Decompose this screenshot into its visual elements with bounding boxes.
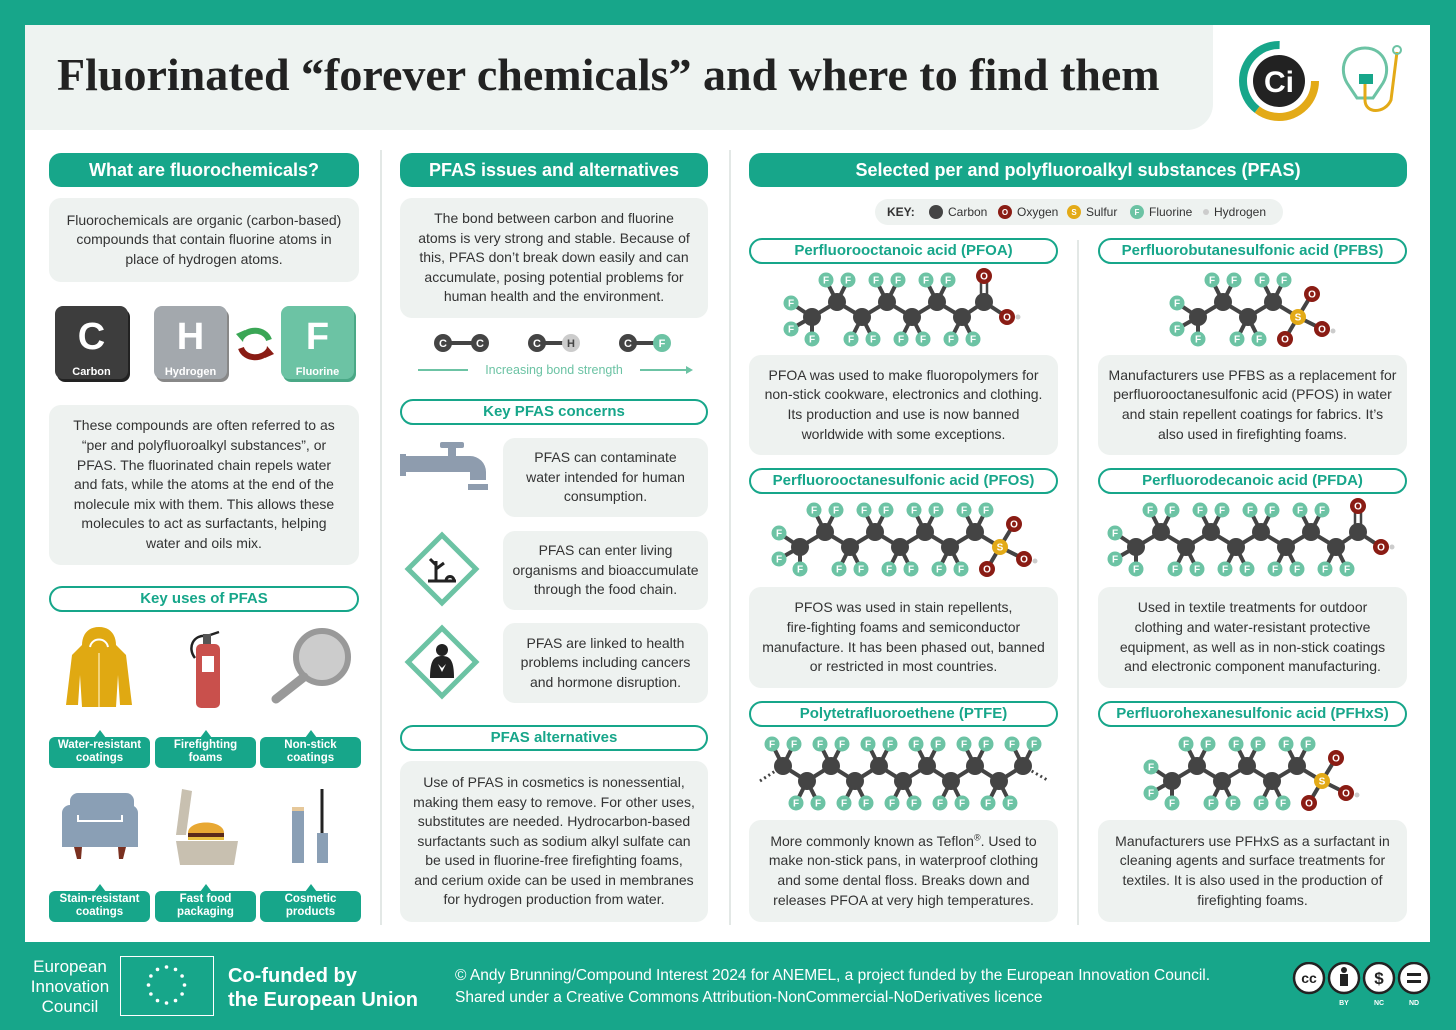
molecule: PFHxS: F: [1148, 788, 1154, 800]
title bar: [25, 25, 1213, 130]
molecule: PFBS: F: [1231, 276, 1237, 286]
molecule: PFDA: F: [1244, 564, 1250, 576]
molecule: PFHxS: O: [1332, 754, 1340, 764]
text block: PFAS explanation: water and oils mix.: [146, 535, 262, 551]
molecule: PFOA: [784, 268, 1020, 346]
text block: definition: compounds that contain fluorine atoms in: [76, 231, 332, 247]
molecule: PFOS: F: [961, 506, 967, 516]
molecule: PTFE: F: [985, 798, 991, 810]
text block: alternatives: Use of PFAS in cosmetics is nonessential,: [423, 774, 685, 790]
molecule: PFOA: F: [873, 276, 879, 286]
heading: PFDA: [1098, 468, 1407, 494]
text block: bioaccumulate: organisms and bioaccumulate: [512, 562, 698, 578]
molecule: PTFE: F: [983, 740, 989, 750]
text block: PFOA: PFOA was used to make fluoropolymers for: [768, 367, 1038, 383]
molecule: PTFE: F: [1009, 740, 1015, 750]
icon: fire extinguisher: [190, 630, 220, 708]
heading: key concerns: [400, 399, 708, 425]
molecule: PFDA: F: [1222, 564, 1228, 576]
label: water-resistant: [49, 737, 150, 768]
footer: EIC name: Council: [42, 997, 98, 1016]
bond strength diagram: H: [567, 338, 575, 350]
molecule: PFDA: F: [1247, 506, 1253, 516]
molecule: PTFE: F: [841, 798, 847, 810]
label: stain-resistant: [49, 891, 150, 922]
molecule: PFHxS: F: [1230, 798, 1236, 810]
molecule: PFHxS: F: [1258, 798, 1264, 810]
text block: PFAS explanation: molecules to act as surfactants, helping: [81, 515, 327, 531]
text block: PFDA: [1098, 587, 1407, 688]
molecule: PFOA: F: [948, 334, 954, 346]
label: water-resistant: Water-resistant: [58, 739, 141, 751]
molecule: PFOS: O: [1010, 520, 1018, 530]
tile: hydrogen: H: [177, 316, 204, 358]
molecule: PFBS: O: [1318, 324, 1326, 336]
label: cosmetic: products: [286, 906, 335, 918]
text block: definition: place of hydrogen atoms.: [125, 251, 283, 267]
icon: tap: [400, 442, 488, 490]
icon: health hazard: [404, 624, 480, 700]
molecule: PTFE: F: [815, 798, 821, 810]
text block: PFBS: Manufacturers use PFBS as a replacement for: [1109, 367, 1396, 383]
text block: alternatives: surfactants such as sodium alkyl sulfate can: [417, 833, 691, 849]
tile: carbon: [55, 306, 128, 379]
molecule: PFOA: F: [788, 324, 794, 336]
text block: PFOA: Its production and use is now banned: [788, 406, 1019, 422]
label: non-stick: [260, 737, 361, 768]
bond strength diagram: F: [659, 338, 666, 350]
heading: PFAS issues and alternatives: [400, 153, 708, 187]
heading: PFAS issues and alternatives: PFAS issues and alternatives: [429, 160, 679, 180]
text block: PFOS: manufacture. It has been phased out, banned: [762, 638, 1045, 654]
text block: PFAS explanation: [49, 405, 359, 565]
bond strength diagram: C: [439, 338, 447, 350]
molecule: PFDA: F: [1197, 506, 1203, 516]
text block: water concern: water intended for human: [526, 469, 685, 485]
text block: alternatives: making them easy to remove. For other uses,: [413, 794, 695, 810]
label: cosmetic: [260, 891, 361, 922]
text block: PFHxS: textiles. It is also used in the production of: [1123, 872, 1382, 888]
icon: cosmetics: [292, 789, 328, 863]
molecule: PFOS: F: [858, 564, 864, 576]
molecule: PFOA: F: [823, 276, 829, 286]
molecule: PTFE: F: [937, 798, 943, 810]
molecule: PFOA: F: [788, 298, 794, 310]
text block: alternatives: for hydrogen production from water.: [443, 891, 664, 907]
molecule: PFOS: F: [908, 564, 914, 576]
text block: PFBS: also used in firefighting foams.: [1158, 426, 1347, 442]
text block: PFDA: clothing and water-resistant protective: [1135, 619, 1370, 635]
molecule: PFHxS: F: [1183, 740, 1189, 750]
molecule: PFHxS: F: [1169, 798, 1175, 810]
logo: compound interest: [1239, 41, 1319, 121]
text block: water concern: PFAS can contaminate: [534, 449, 677, 465]
molecule: PTFE: F: [1007, 798, 1013, 810]
bond strength diagram: Increasing bond strength: [485, 363, 623, 377]
text block: PFDA: equipment, as well as in non-stick coatings: [1120, 638, 1385, 654]
molecule: PTFE: F: [911, 798, 917, 810]
molecule: PFHxS: F: [1305, 740, 1311, 750]
text block: PFBS: [1098, 355, 1407, 455]
text block: PFHxS: [1098, 820, 1407, 922]
molecule: PFOS: O: [983, 564, 991, 576]
heading: PFHxS: Perfluorohexanesulfonic acid (PFHxS): [1116, 705, 1389, 722]
label: water-resistant: coatings: [76, 752, 123, 764]
key legend: KEY:: [887, 205, 915, 219]
molecule: PFOS: F: [861, 506, 867, 516]
molecule: PFDA: F: [1294, 564, 1300, 576]
molecule: PFOS: F: [936, 564, 942, 576]
text block: PFHxS: firefighting foams.: [1197, 892, 1308, 908]
molecule: PFHxS: F: [1148, 762, 1154, 774]
molecule: PFDA: F: [1194, 564, 1200, 576]
molecule: PTFE: F: [839, 740, 845, 750]
molecule: PTFE: F: [865, 740, 871, 750]
molecule: PFOA: F: [920, 334, 926, 346]
molecule: PFDA: F: [1112, 528, 1118, 540]
molecule: PFHxS: F: [1208, 798, 1214, 810]
molecule: PFOA: F: [870, 334, 876, 346]
heading: PFOS: Perfluorooctanesulfonic acid (PFOS): [773, 472, 1034, 489]
icon: environment hazard: [404, 532, 480, 606]
molecule: PFOS: O: [1020, 554, 1028, 566]
footer: CC licence icons: NC: [1374, 1000, 1384, 1007]
molecule: PFHxS: [1144, 736, 1360, 811]
text block: health: [503, 623, 708, 703]
molecule: PTFE: F: [935, 740, 941, 750]
footer: co-funded: the European Union: [228, 989, 418, 1011]
tile: fluorine: Fluorine: [296, 366, 339, 378]
molecule: PTFE: F: [1031, 740, 1037, 750]
molecule: PFHxS: F: [1283, 740, 1289, 750]
molecule: PFOS: F: [776, 528, 782, 540]
text block: alternatives: substitutes are needed. Hydrocarbon-based: [418, 813, 690, 829]
molecule: PFDA: F: [1219, 506, 1225, 516]
molecule: PTFE: F: [887, 740, 893, 750]
heading: PFOS: [749, 468, 1058, 494]
molecule: PFOA: O: [1003, 312, 1011, 324]
tile: fluorine: F: [306, 316, 329, 358]
molecule: PFOA: F: [845, 276, 851, 286]
molecule: PFDA: F: [1319, 506, 1325, 516]
molecule: PFOS: S: [997, 542, 1004, 554]
tile: carbon: C: [78, 316, 105, 358]
text block: PFOA: non-stick cookware, electronics and clothing.: [765, 386, 1042, 402]
element tiles: [55, 306, 356, 382]
molecule: PTFE: F: [817, 740, 823, 750]
text block: bond: [400, 198, 708, 318]
title: Fluorinated “forever chemicals” and where to find them: [57, 49, 1160, 100]
text block: PFOS: or restricted in most countries.: [810, 658, 997, 674]
molecule: PFBS: F: [1174, 298, 1180, 310]
heading: what are fluorochemicals: What are fluorochemicals?: [89, 160, 319, 180]
column separators: [380, 150, 382, 925]
text block: bioaccumulate: PFAS can enter living: [539, 542, 672, 558]
text block: alternatives: [400, 761, 708, 922]
text block: PTFE: releases PFOA at very high temperatures.: [773, 892, 1034, 908]
molecule: PFOS: F: [911, 506, 917, 516]
molecule: PTFE: F: [889, 798, 895, 810]
footer: CC licence icons: BY: [1339, 1000, 1349, 1007]
heading: PFHxS: [1098, 701, 1407, 727]
text block: bond: atoms is very strong and stable. Because of: [418, 230, 690, 246]
text block: PFOS: PFOS was used in stain repellents,: [795, 599, 1012, 615]
logo: plug bulb: [1342, 45, 1402, 112]
bond strength diagram: C: [624, 338, 632, 350]
molecule: PFHxS: O: [1342, 788, 1350, 800]
icon: raincoat: [66, 627, 132, 707]
text block: PFAS explanation: molecule mix with them. This allows these: [74, 496, 334, 512]
key legend: Sulfur: [1086, 205, 1117, 219]
icon: frying pan: [272, 628, 351, 704]
heading: alternatives: PFAS alternatives: [491, 729, 617, 746]
molecule: PFOS: F: [983, 506, 989, 516]
footer: EIC name: European: [33, 957, 107, 976]
heading: selected PFAS: [749, 153, 1407, 187]
molecule: PFOS: [772, 502, 1038, 577]
molecule: PFHxS: F: [1255, 740, 1261, 750]
molecule: PFDA: F: [1322, 564, 1328, 576]
molecule: PTFE: [760, 736, 1049, 810]
key legend: F: [1135, 208, 1140, 217]
footer: EIC name: [31, 957, 109, 1016]
molecule: PFOS: F: [776, 554, 782, 566]
label: stain-resistant: Stain-resistant: [60, 893, 139, 905]
tile: hydrogen: Hydrogen: [165, 366, 216, 378]
text block: health: and hormone disruption.: [530, 674, 681, 690]
text block: water concern: [503, 438, 708, 517]
molecule: PTFE: F: [863, 798, 869, 810]
text block: definition: [49, 198, 359, 282]
label: stain-resistant: coatings: [76, 906, 123, 918]
molecule: PFDA: F: [1344, 564, 1350, 576]
molecule: PFHxS: S: [1319, 776, 1326, 788]
molecule: PFDA: F: [1269, 506, 1275, 516]
molecule: PFDA: [1108, 498, 1394, 576]
text block: bond: accumulate, posing potential problems for: [424, 269, 684, 285]
text block: bond: human health and the environment.: [444, 288, 664, 304]
text block: PFAS explanation: and fats, while the atoms at the end of the: [74, 476, 334, 492]
molecule: PFOA: F: [970, 334, 976, 346]
molecule: PTFE: F: [769, 740, 775, 750]
molecule: PFHxS: F: [1233, 740, 1239, 750]
heading: selected PFAS: Selected per and polyfluoroalkyl substances (PFAS): [855, 160, 1301, 180]
heading: PFBS: Perfluorobutanesulfonic acid (PFBS): [1122, 242, 1383, 259]
heading: alternatives: [400, 725, 708, 751]
key legend: Fluorine: [1149, 205, 1193, 219]
text block: PTFE: [749, 820, 1058, 922]
label: fast food: [155, 891, 256, 922]
footer: CC licence icons: ND: [1409, 1000, 1419, 1007]
text block: PTFE: More commonly known as Teflon®. Used to: [770, 832, 1037, 849]
heading: PFBS: [1098, 238, 1407, 264]
key legend: Carbon: [948, 205, 987, 219]
label: firefighting: Firefighting: [174, 739, 237, 751]
heading: PTFE: [749, 701, 1058, 727]
heading: PTFE: Polytetrafluoroethene (PTFE): [800, 705, 1007, 722]
molecule: PFDA: F: [1133, 564, 1139, 576]
molecule: PFBS: F: [1174, 324, 1180, 336]
label: non-stick: coatings: [287, 752, 334, 764]
molecule: PFBS: S: [1295, 312, 1302, 324]
text block: definition: Fluorochemicals are organic (carbon-based): [67, 212, 341, 228]
molecule: PFOA: F: [809, 334, 815, 346]
tile: hydrogen: [154, 306, 227, 379]
heading: key concerns: Key PFAS concerns: [483, 403, 625, 420]
text block: bioaccumulate: [503, 531, 708, 610]
label: non-stick: Non-stick: [284, 739, 337, 751]
text block: PFHxS: Manufacturers use PFHxS as a surfactant in: [1115, 833, 1390, 849]
text block: PFAS explanation: PFAS. The fluorinated chain repels water: [77, 457, 331, 473]
molecule: PFOA: O: [980, 272, 988, 282]
tile: fluorine: [281, 306, 354, 379]
key legend: Oxygen: [1017, 205, 1058, 219]
text block: health: problems including cancers: [521, 654, 690, 670]
key legend: [875, 199, 1283, 225]
molecule: PFBS: F: [1256, 334, 1262, 346]
footer: co-funded: [228, 965, 418, 1011]
tile: carbon: Carbon: [72, 366, 111, 378]
molecule: PFOA: F: [848, 334, 854, 346]
text block: PTFE: make non-stick pans, in waterproof clothing: [769, 852, 1038, 868]
molecule: PFDA: F: [1169, 506, 1175, 516]
heading: what are fluorochemicals: [49, 153, 359, 187]
heading: PFOA: Perfluorooctanoic acid (PFOA): [794, 242, 1013, 259]
molecule: PFBS: F: [1234, 334, 1240, 346]
molecule: PFBS: F: [1281, 276, 1287, 286]
icon: fast food box: [176, 789, 238, 865]
molecule: PTFE: F: [793, 798, 799, 810]
molecule: PFHxS: F: [1280, 798, 1286, 810]
text block: PFHxS: cleaning agents and surface treatments for: [1120, 852, 1385, 868]
molecule: PFOS: F: [833, 506, 839, 516]
text block: PFOA: worldwide with some exceptions.: [802, 426, 1005, 442]
molecule: PFOA: F: [895, 276, 901, 286]
molecule: PFBS: F: [1209, 276, 1215, 286]
footer: credits: [455, 967, 1210, 1006]
text block: water concern: consumption.: [564, 488, 647, 504]
molecule: PFDA: F: [1112, 554, 1118, 566]
molecule: PFBS: F: [1259, 276, 1265, 286]
text block: PFBS: and stain repellent coatings for fabrics. It’s: [1122, 406, 1383, 422]
molecule: PFOS: F: [933, 506, 939, 516]
molecule: PFDA: O: [1377, 542, 1385, 554]
heading: key uses: Key uses of PFAS: [140, 590, 268, 607]
footer: EU flag: [120, 956, 214, 1016]
molecule: PFDA: F: [1172, 564, 1178, 576]
molecule: PTFE: F: [791, 740, 797, 750]
molecule: PFOS: F: [958, 564, 964, 576]
logo: compound interest: Ci: [1264, 66, 1294, 99]
heading: key uses: [49, 586, 359, 612]
bond strength diagram: C: [476, 338, 484, 350]
icon: swap arrows: [236, 328, 274, 360]
footer: CC licence icons: $: [1374, 969, 1384, 988]
label: fast food: Fast food: [180, 893, 231, 905]
label: fast food: packaging: [177, 906, 234, 918]
label: firefighting: [155, 737, 256, 768]
molecule: PFDA: F: [1297, 506, 1303, 516]
bond strength diagram: [418, 334, 693, 377]
bond strength diagram: C: [533, 338, 541, 350]
text block: PFOA: [749, 355, 1058, 455]
footer: CC licence icons: [1292, 962, 1430, 1007]
label: firefighting: foams: [189, 752, 222, 764]
icon: armchair: [62, 793, 138, 859]
text block: PFAS explanation: “per and polyfluoroalkyl substances”, or: [82, 437, 326, 453]
footer: CC licence icons: cc: [1301, 970, 1317, 986]
molecule: PFDA: F: [1147, 506, 1153, 516]
text block: health: PFAS are linked to health: [526, 635, 684, 651]
text block: bond: The bond between carbon and fluorine: [434, 210, 674, 226]
molecule: PFOS: F: [883, 506, 889, 516]
text block: PTFE: and some dental floss. Breaks down and: [777, 872, 1030, 888]
footer: EIC name: Innovation: [31, 977, 109, 996]
heading: PFDA: Perfluorodecanoic acid (PFDA): [1142, 472, 1363, 489]
molecule: PFOA: F: [898, 334, 904, 346]
label: cosmetic: Cosmetic: [285, 893, 336, 905]
molecule: PFDA: F: [1272, 564, 1278, 576]
text block: bond: this, PFAS don’t break down easily and can: [419, 249, 689, 265]
molecule: PFDA: O: [1354, 502, 1362, 512]
molecule: PFBS: O: [1281, 334, 1289, 346]
text block: PFOS: [749, 587, 1058, 688]
text block: PFOS: fire-fighting foams and semiconductor: [787, 619, 1020, 635]
molecule: PFOA: F: [923, 276, 929, 286]
molecule: PTFE: F: [959, 798, 965, 810]
molecule: PTFE: F: [961, 740, 967, 750]
text block: PFDA: and electronic component manufacturing.: [1124, 658, 1381, 674]
text block: bioaccumulate: through the food chain.: [534, 581, 677, 597]
text block: PFBS: perfluorooctanesulfonic acid (PFOS) in water: [1113, 386, 1392, 402]
heading: PFOA: [749, 238, 1058, 264]
molecule: PFBS: F: [1195, 334, 1201, 346]
text block: alternatives: and cerium oxide can be used in membranes: [414, 872, 694, 888]
footer: co-funded: Co-funded by: [228, 965, 357, 987]
footer: credits: Shared under a Creative Commons Attribution-NonCommercial-NoDerivatives licence: [455, 989, 1043, 1006]
molecule: PFHxS: O: [1305, 798, 1313, 810]
key legend: Hydrogen: [1214, 205, 1266, 219]
key legend: O: [1002, 208, 1008, 217]
molecule: PFBS: [1170, 272, 1336, 347]
molecule: PTFE: F: [913, 740, 919, 750]
molecule: PFOS: F: [797, 564, 803, 576]
text block: PFAS explanation: These compounds are often referred to as: [73, 417, 335, 433]
molecule: PFHxS: F: [1205, 740, 1211, 750]
molecule: PFOS: F: [836, 564, 842, 576]
footer: credits: © Andy Brunning/Compound Interest 2024 for ANEMEL, a project funded by the European Innovation Council.: [455, 967, 1210, 984]
molecule: PFOS: F: [811, 506, 817, 516]
text block: alternatives: be used in fluorine-free firefighting foams,: [425, 852, 683, 868]
molecule: PFOS: F: [886, 564, 892, 576]
molecule: PFBS: O: [1308, 290, 1316, 300]
molecule: PFOA: F: [945, 276, 951, 286]
key legend: S: [1071, 208, 1077, 217]
text block: PFDA: Used in textile treatments for outdoor: [1138, 599, 1367, 615]
